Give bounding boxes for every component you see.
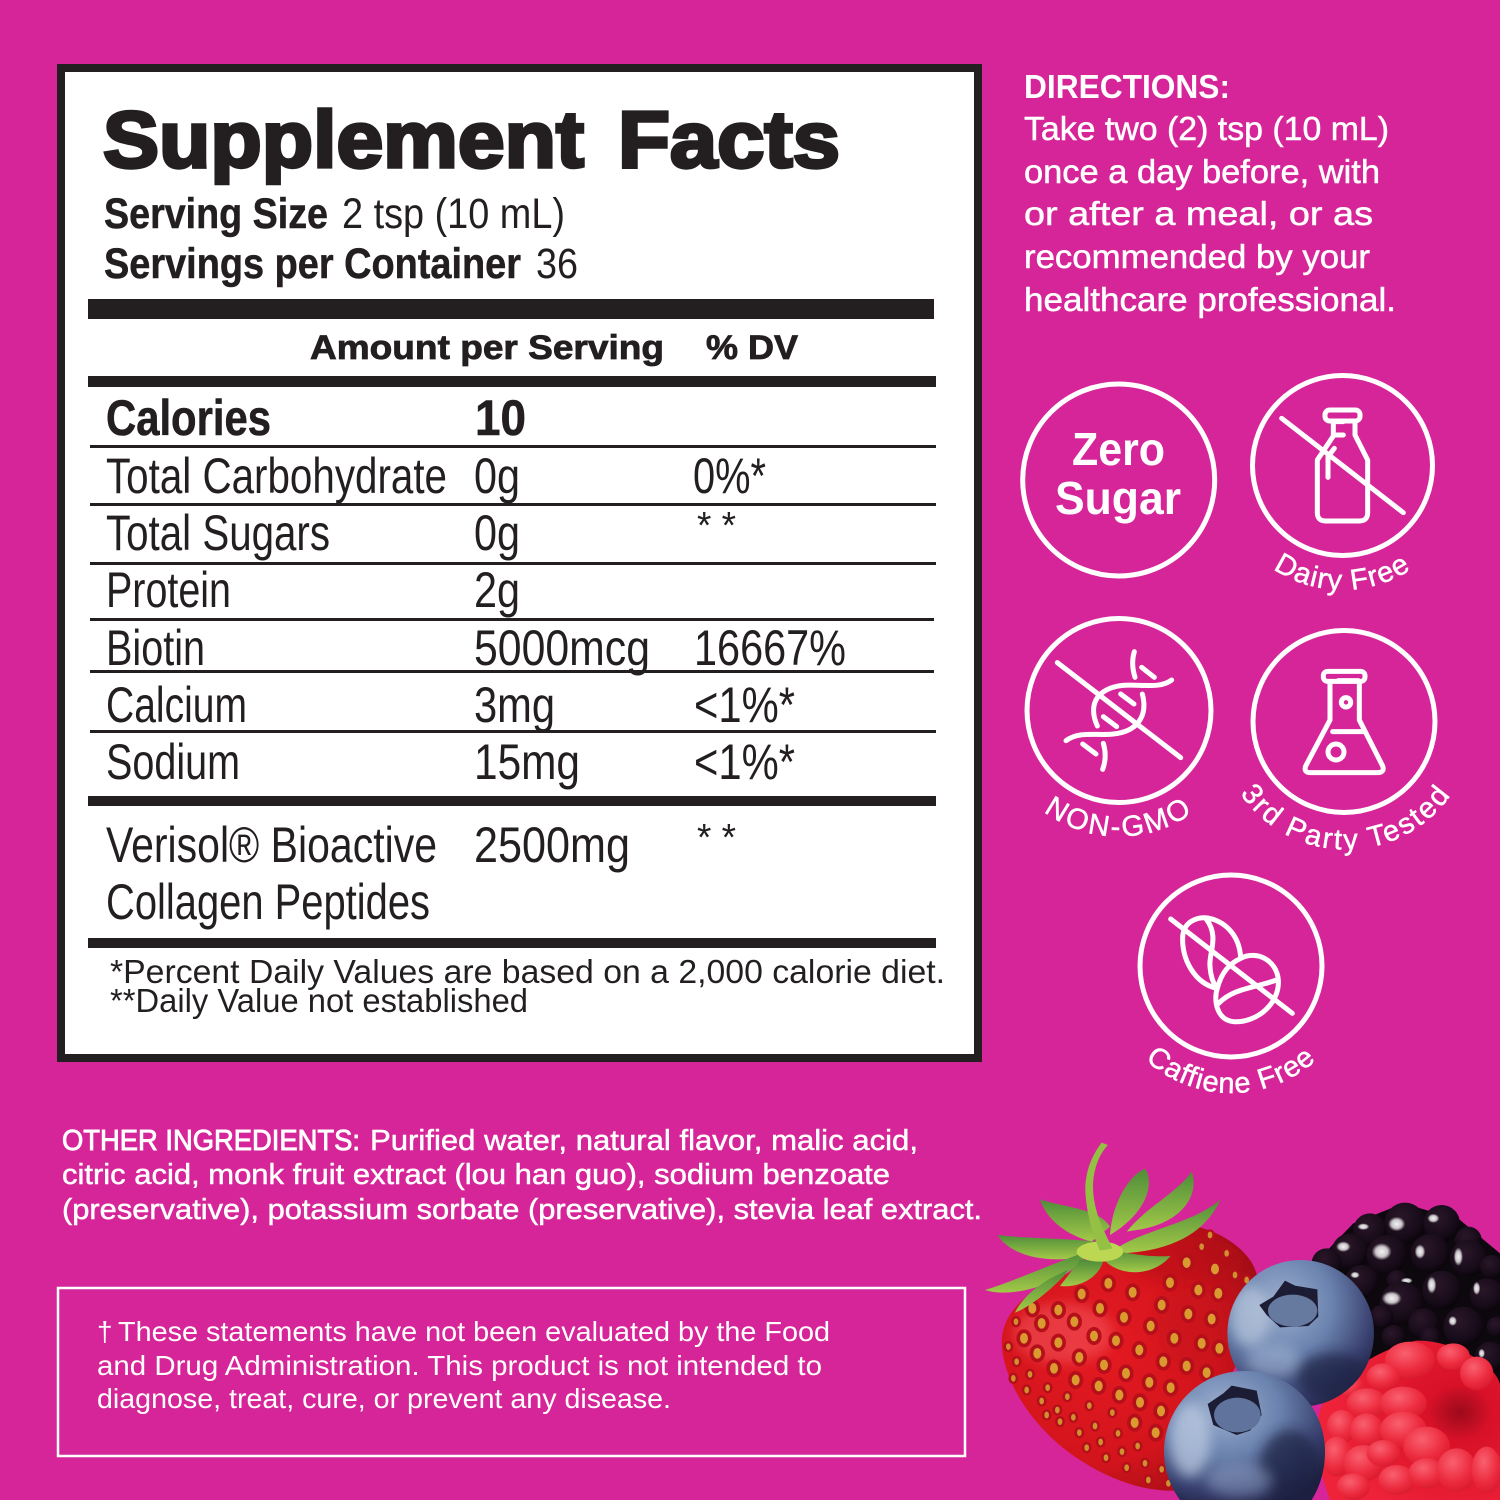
other ingredients: Purified water, natural flavor, malic acid, (370, 1125, 918, 1157)
badge: zero sugar: Zero (1072, 423, 1165, 475)
row: protein (106, 562, 520, 618)
title (103, 95, 840, 184)
badge: caffeine free (1138, 872, 1324, 1094)
disclaimer box: These statements have not been evaluated by the Food (118, 1316, 830, 1347)
row: total carbohydrate: 0g (474, 448, 520, 504)
row: collagen: 2500mg (474, 817, 630, 873)
badge: non-gmo (1024, 616, 1214, 836)
row: total carbohydrate: 0%* (693, 448, 766, 504)
row: total sugars: Total Sugars (106, 505, 330, 561)
footnotes: *Percent Daily Values are based on a 2,000 calorie diet. (110, 953, 945, 990)
directions: or after a meal, or as (1024, 195, 1373, 232)
serving size: Serving Size (104, 190, 328, 238)
blueberry: upper (1227, 1260, 1374, 1407)
directions: recommended by your (1024, 238, 1370, 275)
icon: crossed milk bottle (1282, 410, 1403, 521)
label: dairy free: Dairy Free (1274, 552, 1408, 596)
directions (1024, 68, 1396, 318)
row: sodium (106, 734, 795, 790)
serving size: Servings per Container (104, 240, 521, 288)
footnotes (110, 953, 945, 1019)
directions: DIRECTIONS: (1024, 68, 1230, 105)
strawberry (985, 1143, 1257, 1491)
row: calories: Calories (106, 390, 271, 446)
title: Supplement (103, 95, 584, 184)
serving size: 2 tsp (10 mL) (342, 190, 565, 238)
row: biotin: 5000mcg (474, 620, 650, 676)
badge: zero sugar (1023, 384, 1215, 576)
row: calcium (106, 677, 795, 733)
other ingredients: citric acid, monk fruit extract (lou han guo), sodium benzoate (62, 1159, 890, 1191)
row: total carbohydrate: Total Carbohydrate (106, 448, 447, 504)
label: non-gmo: NON-GMO (1045, 796, 1188, 836)
row: calcium: Calcium (106, 677, 247, 733)
table header: Amount per Serving (310, 329, 664, 367)
row: calories (106, 390, 526, 446)
row: calcium: 3mg (474, 677, 555, 733)
icon: flask (1305, 671, 1383, 773)
blueberry: lower (1164, 1371, 1325, 1500)
label: caffiene free: Caffiene Free (1149, 1048, 1314, 1094)
other ingredients: OTHER INGREDIENTS: (62, 1125, 360, 1157)
title: Facts (618, 95, 840, 184)
row: collagen: Collagen Peptides (106, 874, 430, 930)
row: biotin: Biotin (106, 620, 205, 676)
strawberry calyx (985, 1143, 1221, 1313)
panel: supplement facts (61, 68, 978, 1058)
badge: zero sugar: Sugar (1055, 472, 1181, 524)
row: biotin (106, 620, 846, 676)
disclaimer box: † (97, 1316, 113, 1347)
blackberry (1312, 1203, 1500, 1383)
icon: crossed coffee beans (1171, 918, 1292, 1022)
table header: % DV (706, 329, 798, 367)
disclaimer box (58, 1288, 965, 1456)
strawberry seeds (1003, 1229, 1252, 1489)
row: total carbohydrate (106, 448, 766, 504)
icon: crossed dna (1057, 652, 1181, 769)
row: calories: 10 (475, 390, 526, 446)
row: total sugars (106, 505, 736, 561)
raspberry (1317, 1341, 1500, 1500)
row: calcium: <1%* (694, 677, 795, 733)
directions: once a day before, with (1024, 153, 1380, 190)
row: protein: Protein (106, 562, 231, 618)
row: total sugars: * * (697, 505, 736, 547)
row: sodium: 15mg (474, 734, 580, 790)
label: 3rd party tested: 3rd Party Tested (1242, 784, 1450, 856)
serving size (104, 190, 578, 288)
other ingredients (62, 1125, 982, 1226)
footnotes: **Daily Value not established (110, 982, 528, 1019)
row: protein: 2g (474, 562, 520, 618)
row: total sugars: 0g (474, 505, 520, 561)
illustration: berries (985, 1143, 1500, 1500)
directions: healthcare professional. (1024, 281, 1396, 318)
row: sodium: Sodium (106, 734, 240, 790)
serving size: 36 (536, 240, 578, 288)
badge: dairy free (1250, 373, 1435, 596)
directions: Take two (2) tsp (10 mL) (1024, 110, 1389, 147)
table header (310, 329, 798, 367)
row: biotin: 16667% (694, 620, 846, 676)
row: collagen: * * (697, 817, 736, 859)
row: collagen (106, 817, 736, 930)
other ingredients: (preservative), potassium sorbate (preservative), stevia leaf extract. (62, 1194, 982, 1226)
disclaimer box: and Drug Administration. This product is not intended to (97, 1350, 822, 1381)
row: sodium: <1%* (694, 734, 795, 790)
badge: 3rd party tested (1242, 628, 1450, 856)
disclaimer box: diagnose, treat, cure, or prevent any disease. (97, 1383, 671, 1414)
row: collagen: Verisol® Bioactive (106, 817, 437, 873)
